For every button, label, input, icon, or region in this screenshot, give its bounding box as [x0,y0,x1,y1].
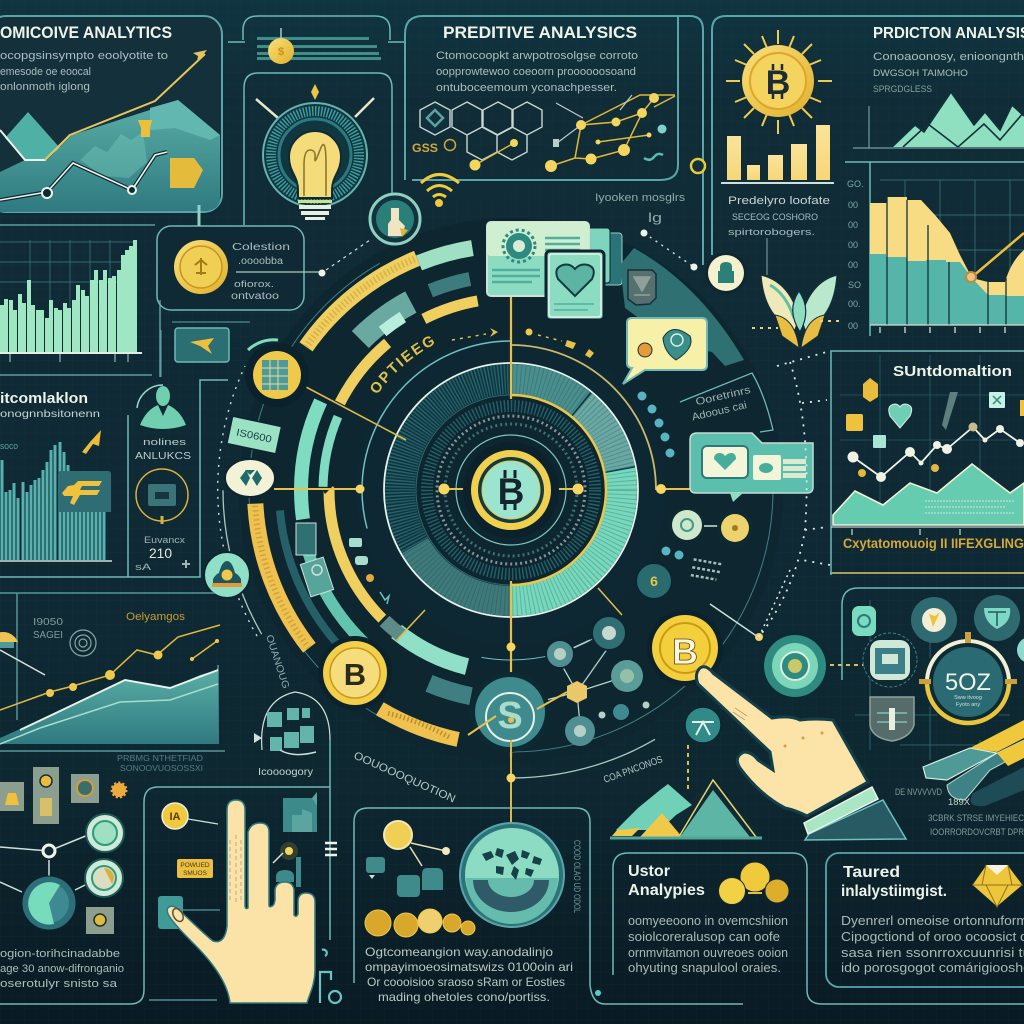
floating label [595,192,686,225]
description: ido porosgogot comárigioosho [841,961,1024,975]
dark backing disc [239,218,783,762]
coins row [365,909,475,937]
description: SPRGDGLESS [873,84,932,95]
globe disc [460,823,564,927]
icon tile [852,606,876,636]
small captions: DE NVVVVVD [895,787,942,797]
stat: Euvancx [144,535,186,545]
mint bars [2,240,135,352]
note text: .oooobba [238,256,283,267]
description [0,50,168,93]
green rings [85,814,124,897]
panel: top-left analytics [0,16,222,212]
rotated arc labels: OUANOUG [263,634,291,690]
small data label: PRBMG NTHETFIAD [117,753,203,763]
person label: ANLUKCS [135,450,191,462]
radial diagram [217,218,782,779]
medallion [919,632,1017,727]
icon: leaf emblem [761,275,837,348]
description: mading ohetoles cono/portiss. [378,990,550,1004]
rotated arc labels: OOUOOOQUOTION [352,750,457,806]
area [833,464,1024,525]
description: age 30 anow-difronganio [0,963,124,975]
y axis labels: 00. [848,299,861,309]
icon: yellow tag [170,158,203,188]
description [365,945,573,1004]
description: soiolcoreralusop can oofe [628,930,780,944]
label chip [177,859,213,878]
icon: person coin [370,194,420,244]
panel: automation left: soco [0,441,18,451]
dash data rows [691,559,723,580]
small data label [117,753,203,773]
speech bubble [623,318,707,384]
node: grid icon [245,340,309,407]
description: oomyeeoono in ovemcshiion [628,914,788,928]
icon: coin [174,240,228,294]
small circles right [669,507,753,546]
label chip [227,416,282,454]
teal area [0,670,218,744]
label GSS [412,140,456,155]
check badge [911,597,957,643]
connector bracket with coin: $ [278,46,284,58]
description: Conoaoonosy, enioongnth [873,51,1024,63]
panel: second bar chart [0,225,160,377]
panel: tailored insights [826,853,1024,987]
teal series [870,254,1024,325]
icon: IA coin [162,803,218,829]
description [873,51,1024,95]
panel: stacked area chart [845,162,1024,336]
yellow trend [0,625,220,710]
y axis labels: 00 [848,321,858,331]
icon: ring gauge [136,469,188,524]
mint badge [974,595,1024,663]
pie [22,876,76,930]
description: Cipogctiond of oroo ocoosict di [841,930,1024,944]
label chip: POWUED [180,862,210,869]
heading: SUntdomaltion [893,364,1012,380]
description: ocopgsinsympto eoolyotite to [0,50,168,62]
icon: hand [167,800,315,1003]
center coin: B [498,471,524,512]
coin S: S [497,695,523,737]
small icon card [161,322,250,377]
label chip: IS0600 [235,427,273,446]
node cluster [546,616,650,746]
panel: lower-left trend chart: SAGEI [33,630,63,641]
white connector with node [710,570,790,641]
floating label: Iyooken mosglrs [595,192,686,204]
description: Dyenrerl omeoise ortonnuformi [841,914,1024,928]
icon: spiral [70,630,96,656]
medallion: Fyoto any [956,702,980,708]
panel: globe [354,740,743,1004]
caption: Predelyro loofate [728,195,830,207]
icon: yellow cup [138,120,152,137]
icon: lock badge [705,252,747,294]
node dots [640,230,698,270]
note text: ofiorox. [234,279,274,289]
heading [841,864,947,900]
description: onlonmoth iglong [0,81,90,93]
icon: person [137,385,186,429]
label chip: SMUOS [183,870,208,877]
cube stack [254,692,330,755]
square icons [0,767,126,934]
heading: itcomlaklon [0,391,88,407]
stripes icon [325,843,337,855]
description: oserotulyr snisto sa [0,978,118,990]
description [0,948,124,990]
caption [728,195,830,238]
heading: PREDITIVE ANALYSICS [443,24,637,42]
outer dotted and thin rings [218,202,799,778]
medallion: 5OZ [945,669,991,696]
icon: circle C [636,563,672,599]
description: oopprowtewoo coeoorn proooooosoand [436,66,636,78]
curved note [680,373,773,432]
note text: ontvatoo [231,291,280,302]
icon: bitcoin coin: B [766,64,790,102]
description: ontuboceemoum yconachpesser. [436,82,617,94]
top-left chart area [0,50,220,212]
chat icons [366,857,443,897]
icon: circle C: 6 [650,573,658,589]
small captions: 189X [948,797,970,807]
ring connector [691,159,705,173]
floating label: lg [648,210,662,225]
heading: inlalystiimgist. [841,883,947,900]
dotted link left [752,321,840,328]
coin B [318,636,392,710]
finger detail [171,835,241,923]
description: Ogtcomeangion way.anodalinjo [365,945,553,959]
arrow link [198,205,200,226]
y axis labels: 00 [848,240,858,250]
small arc widgets [296,523,389,604]
description: Ctomocoopkt arwpotrosolgse corroto [436,50,638,62]
top connector rule [830,572,1024,574]
medallion: Sww itvoog [954,695,982,701]
icon: diamond [972,865,1023,907]
thumb pad [158,896,220,929]
y axis labels: 00 [848,260,858,270]
card: gear [487,222,589,296]
y axis labels: SO [848,280,861,290]
spokes [510,296,512,757]
y axis labels: GO. [847,179,864,189]
panel: light bulb [244,73,392,225]
panel: medallion [830,573,1024,837]
line [853,427,1020,477]
panel: automation left [0,380,228,577]
panel: lower-left trend chart: Oelyamgos [126,611,186,623]
description: DWGSOH TAIMOHO [873,68,968,79]
teal square icon [276,792,317,887]
icon: arrow [82,430,101,454]
heading: Analypies [628,882,705,899]
panel: lower-left node tree [0,740,330,1004]
building badge [863,633,917,687]
y axis labels: 00 [848,220,858,230]
trend line [972,233,1024,277]
description: sasa rien ssonrroxcuunrisi tu [841,946,1024,960]
panel: utor analytics [613,853,1024,1004]
yellow tag icon [58,471,111,512]
coin S [468,672,567,752]
hexagon network [420,102,542,160]
glow dot [273,842,298,863]
badge: person circle [204,552,250,598]
label GSS: GSS [412,141,438,155]
description: ohyuting snapulool oraies. [628,961,781,975]
blue dots [638,392,684,560]
rotated arc labels [263,634,665,806]
stat [135,535,190,572]
oval badge [225,459,275,497]
teal x badge [685,707,721,743]
small dashes and arrows [452,328,594,358]
yellow node graph [470,93,675,172]
icon: bitcoin coin [742,45,814,117]
small captions [895,787,1024,837]
small data label: SONOOVUOSOSSXI [120,763,203,773]
heading: OMICOIVE ANALYTICS [0,24,172,42]
rays [726,30,832,134]
heading: Taured [843,864,900,881]
teal bars [2,442,104,560]
dark fan with shield icon [620,248,744,366]
icon: light bulb [289,131,341,220]
icons [846,378,1024,448]
icon: dome [0,632,45,675]
y axis labels [847,179,864,331]
person label: nolines [143,437,187,447]
panel: bitcoin sun and bars [712,16,1024,275]
left band segments [255,234,767,746]
y axis labels: 00 [848,200,858,210]
note text [231,242,290,302]
description: ompayimoeosimatswizs 0100oin ari [365,960,573,974]
icon: wifi [421,174,459,206]
coin B: B [344,657,366,692]
dotted tracer lines right [759,351,830,637]
panel: document cards [487,222,622,320]
rotated arc labels: COA PNCONOS [602,754,665,786]
caption: SECEOG COSHORO [732,212,818,223]
description: ornmvitamon ouvreoes ooion [628,946,788,960]
curved label: OPTIEEG [370,336,434,393]
panel: predictive analytics [405,16,703,265]
gold coins [718,862,789,904]
caption: spirtorobogers. [728,227,815,238]
description [841,914,1024,975]
inner dial [356,335,666,645]
slanted ribbons [923,720,1024,806]
yellow series [870,197,1024,300]
yellow bars [727,125,830,180]
description: Or coooisioo sraoso sRam or Eosties [367,975,565,989]
description: ogion-torihcinadabbe [0,948,120,960]
magnifier [384,821,450,866]
panel: lower-left trend chart [0,593,225,751]
rays [256,98,374,118]
panel: lower-left trend chart: I9050 [33,617,64,628]
curved note: Ooretrinrs [694,384,752,408]
bitcoin coin gold: B [672,631,698,672]
category label: Icoooogory [258,766,314,778]
bulb rings [263,103,367,207]
panel: coin note [157,205,370,310]
person label [135,437,191,462]
icon: pointing hand [696,667,906,840]
area caption [925,501,1015,513]
ring link [320,950,341,1003]
description: emesode oe eoocal [0,66,91,78]
description [628,914,788,975]
panel: hand [149,792,341,1003]
center coin [463,442,559,538]
dotted connector [830,664,867,666]
curved note: Adoous cai [691,399,748,423]
icon: target circle [760,631,830,701]
heading: Ustor [628,863,670,880]
stat: 210 [149,545,172,561]
icon: IA coin: IA [170,811,181,823]
connector bracket with coin [228,16,405,64]
mountain chart [853,92,1024,148]
shield badge [870,697,914,741]
chat card [690,433,813,502]
description [436,50,638,94]
mountains [610,780,762,838]
vertical note: COOD OLAO UD ODOL [572,840,582,913]
note text: Colestion [232,242,290,253]
dotted link to lock [644,233,694,267]
subheading: onognnbsitonenn [0,408,100,420]
heading [628,863,705,899]
panel: automation [831,351,1024,575]
card: heart [546,251,604,320]
stat: sA [135,562,151,572]
bitcoin coin gold [647,610,723,686]
